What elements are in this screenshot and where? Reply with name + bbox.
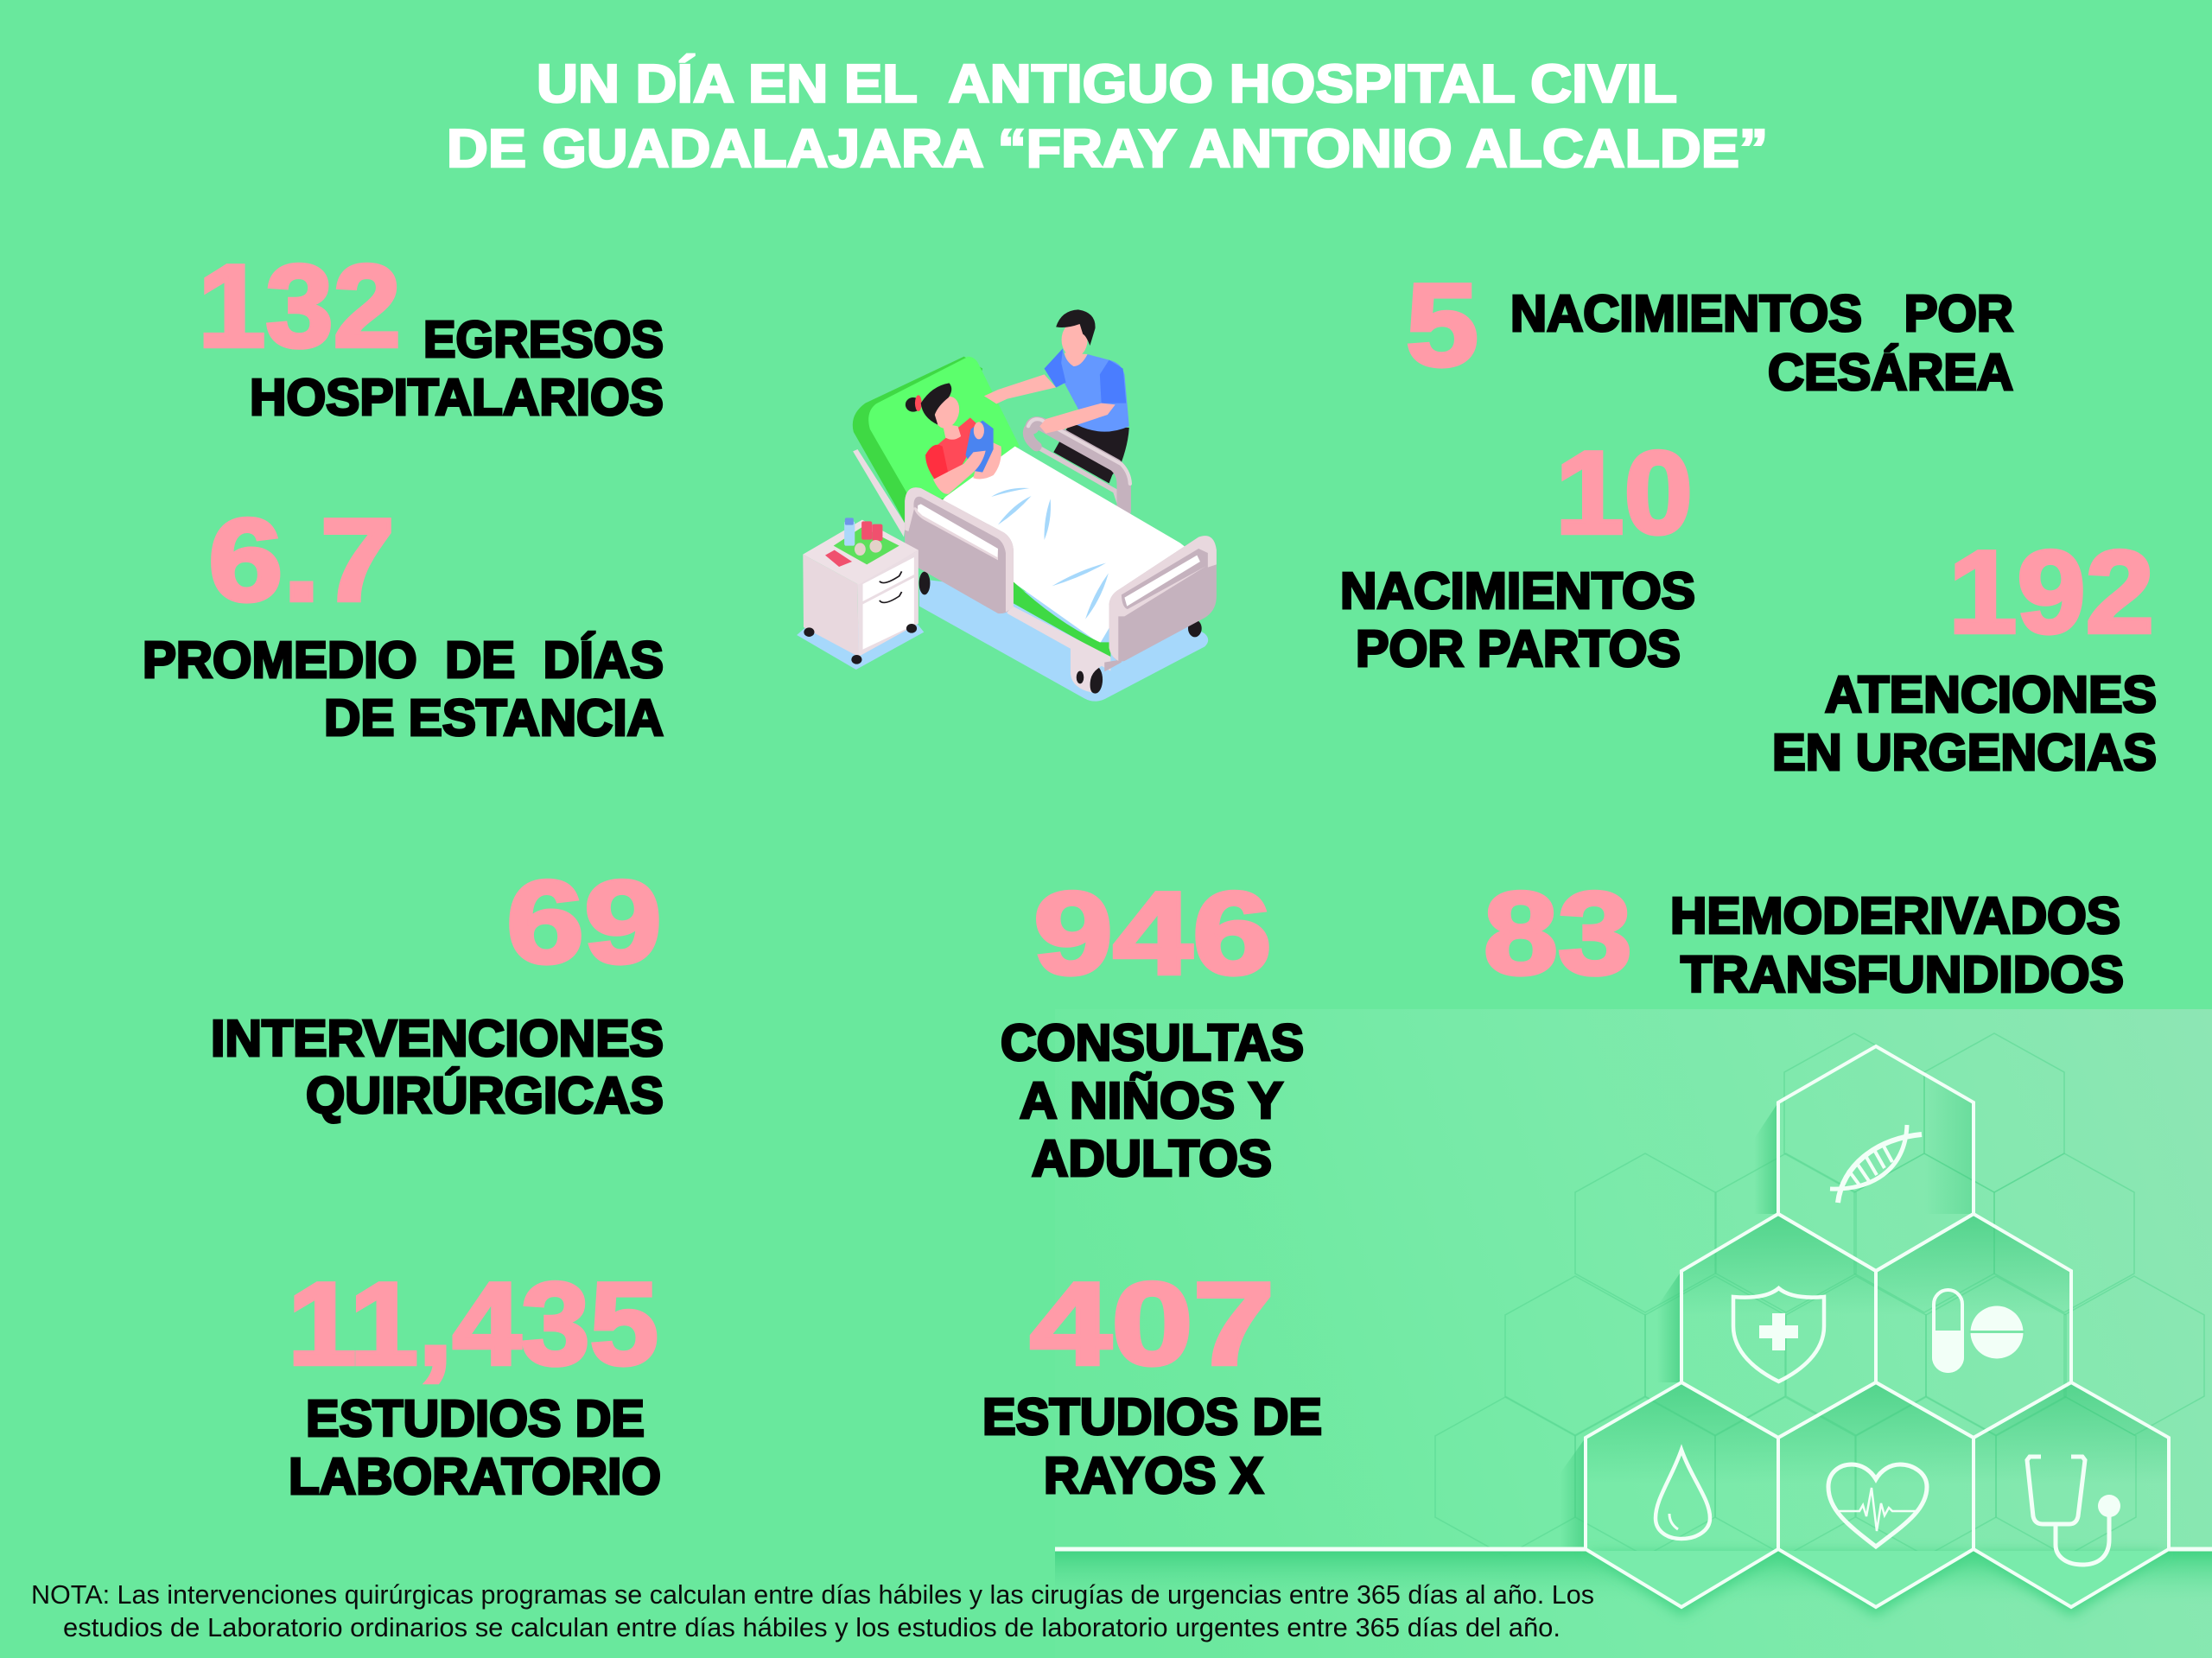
number: 132 — [198, 240, 401, 372]
label: CESÁREA — [1768, 344, 2013, 401]
number: 6.7 — [208, 494, 395, 626]
number: 407 — [1030, 1258, 1274, 1389]
label: ESTUDIOS DE — [982, 1388, 1322, 1445]
hexagon lower tips — [1586, 1551, 2169, 1607]
stat: 6.7 promedio de días de estancia — [143, 494, 664, 746]
label — [289, 1390, 661, 1505]
rear rail — [1028, 419, 1130, 514]
sheet creases — [991, 488, 1109, 619]
sheet — [929, 447, 1200, 644]
stat: 69 intervenciones quirúrgicas — [211, 856, 664, 1124]
label: DE ESTANCIA — [324, 689, 664, 746]
wheels — [919, 572, 1202, 637]
title: UN DÍA EN EL ANTIGUO HOSPITAL CIVIL — [537, 54, 1677, 114]
label — [982, 1388, 1322, 1504]
footnote — [31, 1579, 1594, 1642]
label: PROMEDIO DE DÍAS — [143, 632, 664, 689]
bed frame rear strip — [853, 449, 906, 537]
icon: stethoscope — [2027, 1457, 2120, 1565]
icon: heart with pulse — [1828, 1464, 1927, 1547]
bedside table — [803, 518, 918, 664]
number: 69 — [506, 856, 662, 988]
illustration: mother with newborn in hospital bed — [797, 309, 1217, 702]
label: POR PARTOS — [1356, 620, 1681, 677]
outer side shadows — [1560, 1102, 1778, 1549]
icon: DNA helix — [1830, 1125, 1922, 1203]
footnote: NOTA: Las intervenciones quirúrgicas programas se calculan entre días hábiles y las cirugías de urgencias entre 365 días al año. Los — [31, 1579, 1594, 1610]
stat: 946 consultas a niños y adultos — [1001, 867, 1304, 1187]
number: 5 — [1406, 259, 1478, 391]
label: EN URGENCIAS — [1772, 724, 2157, 781]
label: HOSPITALARIOS — [250, 369, 664, 426]
shadow strip under the line — [1055, 1551, 2212, 1604]
stat: 10 nacimientos por partos — [1340, 427, 1695, 677]
label: HEMODERIVADOS — [1670, 887, 2120, 944]
number: 10 — [1555, 427, 1693, 558]
woman with baby — [906, 383, 1001, 494]
title: DE GUADALAJARA “FRAY ANTONIO ALCALDE” — [447, 119, 1768, 179]
label: LABORATORIO — [289, 1448, 661, 1505]
label: ATENCIONES — [1825, 666, 2157, 723]
number: 11,435 — [288, 1258, 658, 1389]
label: INTERVENCIONES — [211, 1010, 664, 1067]
number: 946 — [1033, 867, 1272, 999]
label: NACIMIENTOS — [1340, 562, 1695, 619]
front side rail — [905, 487, 1014, 613]
label — [1001, 1014, 1304, 1187]
stat: 192 atenciones en urgencias — [1772, 526, 2157, 781]
label — [211, 1010, 664, 1124]
label: CONSULTAS — [1001, 1014, 1304, 1071]
hexagon inner shading — [1586, 1214, 2169, 1607]
icon: shield with cross — [1733, 1288, 1824, 1382]
stat: 132 egresos hospitalarios — [198, 240, 664, 426]
label: RAYOS X — [1044, 1447, 1263, 1504]
label: ADULTOS — [1032, 1130, 1272, 1187]
man front arm — [1039, 403, 1116, 434]
man — [984, 309, 1129, 483]
label: ESTUDIOS DE — [306, 1390, 645, 1447]
panel: medical hexagon background — [1055, 1009, 2212, 1658]
white hexagon outlines and base line — [1055, 1046, 2212, 1607]
label: TRANSFUNDIDOS — [1681, 946, 2124, 1003]
footboard — [1109, 536, 1217, 662]
hexagon lower-tip shadow — [1586, 1553, 2169, 1616]
backrest — [853, 357, 1020, 524]
label — [1510, 285, 2013, 401]
label: NACIMIENTOS POR — [1510, 285, 2013, 342]
title — [447, 54, 1768, 179]
floor shadows — [797, 579, 1208, 702]
stat: 5 nacimientos por cesárea — [1406, 259, 2013, 401]
number: 192 — [1948, 526, 2154, 657]
label — [1340, 562, 1695, 677]
footnote: estudios de Laboratorio ordinarios se calculan entre días hábiles y los estudios de laboratorio urgentes entre 365 días del año. — [63, 1612, 1560, 1642]
label — [250, 311, 664, 426]
number: 83 — [1484, 867, 1632, 999]
label: A NIÑOS Y — [1020, 1072, 1283, 1129]
stat: 83 hemoderivados transfundidos — [1484, 867, 2124, 1003]
top hexagon inner right shadow — [1924, 1074, 1974, 1214]
icon: capsule and tablet — [1932, 1290, 2024, 1373]
label: QUIRÚRGICAS — [306, 1067, 664, 1124]
faint background hexagons — [1435, 1033, 2204, 1556]
stat: 407 estudios de rayos x — [982, 1258, 1322, 1504]
panel gradient field — [1055, 1009, 2212, 1658]
bed base — [1007, 581, 1122, 694]
stat: 11,435 estudios de laboratorio — [288, 1258, 661, 1505]
label — [1670, 887, 2124, 1003]
label — [143, 632, 664, 746]
label: EGRESOS — [423, 311, 664, 368]
icon: water drop — [1656, 1450, 1710, 1539]
label — [1772, 666, 2157, 781]
